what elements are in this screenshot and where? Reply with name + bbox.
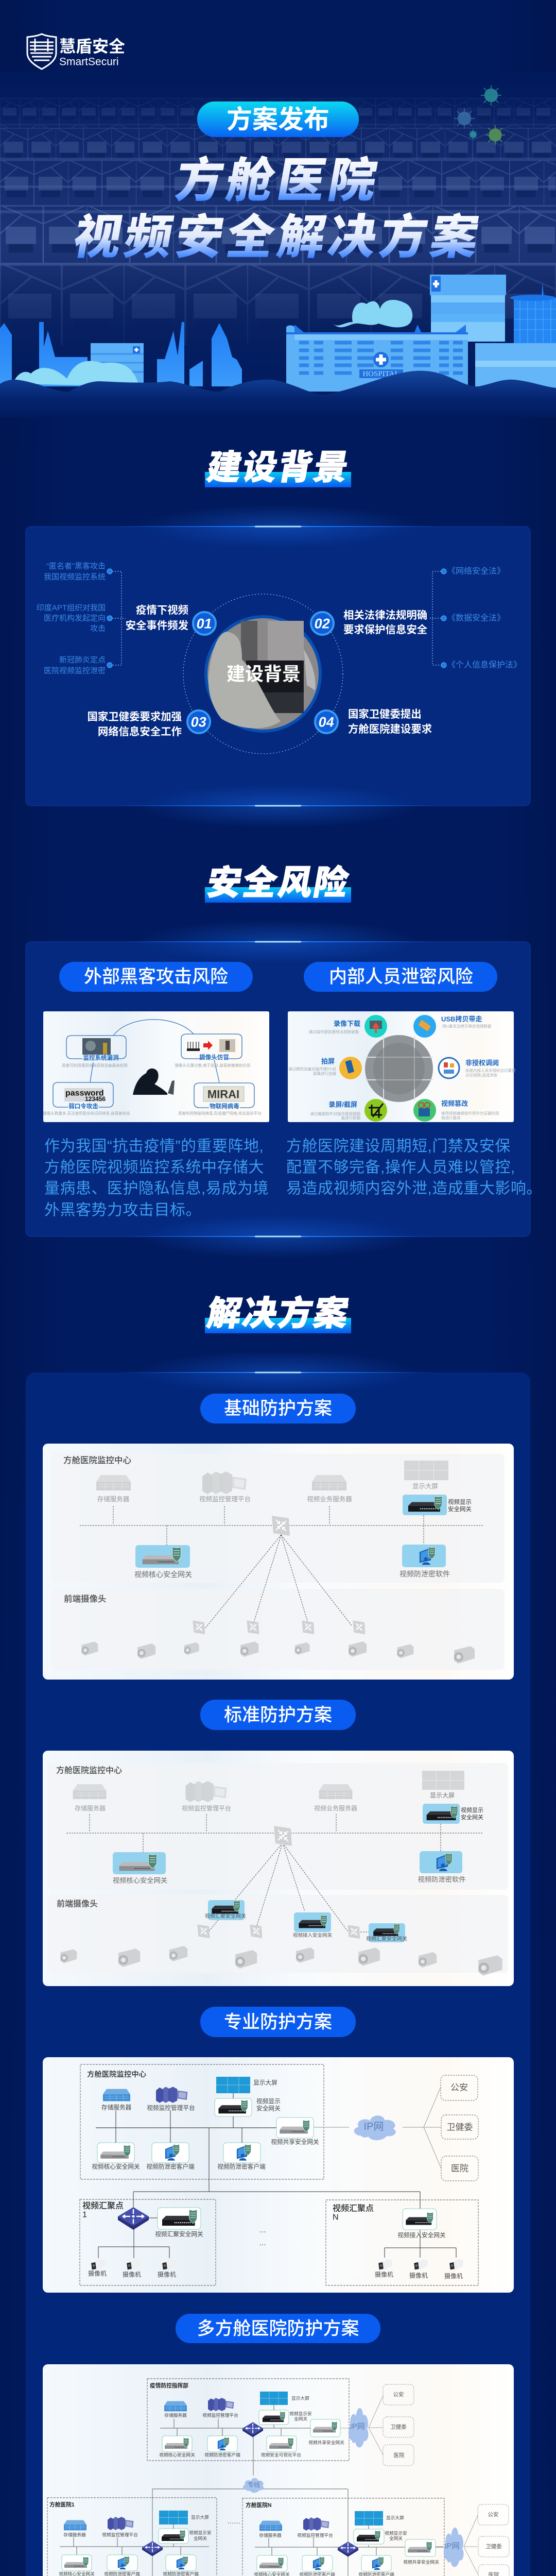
circle: recording download (309, 1015, 387, 1038)
text: external risk description: 量病患、医护隐私信息,易成为境 (44, 1180, 269, 1197)
main title: 视频安全解决方案 (70, 210, 486, 264)
item 01: incidents: 安全事件频发 (126, 619, 188, 632)
access switches (197, 1924, 360, 1939)
device: management platform (182, 1781, 231, 1812)
device: aggregation gateway A (205, 1900, 246, 1920)
hero banner (0, 34, 556, 417)
item 02 details list: 《网络安全法》 (447, 566, 505, 576)
box: monitoring vulnerability (62, 1036, 128, 1067)
circle: unauthorized access: 系统内部人员非授权访问重要 (465, 1067, 516, 1073)
pill: standard protection: 标准防护方案 (224, 1705, 332, 1725)
cloud: command IP network and agencies: 医院 (393, 2452, 405, 2459)
aggregation point 1: 摄像机 (123, 2270, 141, 2278)
circle: USB copy: USB拷贝带走 (441, 1015, 482, 1023)
device: display gateway (403, 1495, 472, 1515)
ellipsis between points: … (259, 2239, 266, 2247)
pill: external risk: 外部黑客攻击风险 (84, 967, 228, 987)
diagram: basic protection (43, 1444, 514, 1680)
hospital 1: 全网关 (194, 2535, 207, 2541)
device: access gateway: 视频接入安全网关 (293, 1932, 332, 1938)
text: external risk description: 方舱医院视频监控系统中存储大 (44, 1159, 264, 1176)
main title (70, 154, 486, 264)
device: aggregation gateway B (366, 1923, 407, 1942)
box: weak password: password (65, 1089, 104, 1097)
device: core switch (272, 1516, 290, 1536)
circle: USB copy: 用U盘非法拷贝带走视频数据 (442, 1023, 492, 1028)
box: monitoring vulnerability: 监控系统漏洞 (83, 1054, 118, 1061)
hospital 1: 显示大屏 (191, 2514, 209, 2520)
circle: unauthorized access: 非授权调阅 (465, 1059, 499, 1066)
item 04: 国家卫健委提出 (348, 708, 422, 720)
hospital N: 存储服务器 (259, 2532, 282, 2538)
item 01: incidents (126, 604, 216, 635)
logo: 慧盾安全 SmartSecuri: SmartSecuri (59, 56, 119, 68)
diagram: basic protection: 方舱医院监控中心 (63, 1455, 132, 1465)
device: display gateway (423, 1804, 483, 1824)
item 02: laws: 相关法律法规明确 (343, 609, 427, 621)
item 02: laws: 02 (313, 616, 332, 631)
item 02: laws: 要求保护信息安全 (343, 623, 428, 636)
device: management platform: 视频监控管理平台 (199, 1495, 251, 1503)
dotted orbit circle (183, 594, 343, 754)
ellipsis between points: … (259, 2226, 266, 2234)
agency labels: 卫健委 (447, 2123, 473, 2132)
circle: unauthorized access: 点位视频,造成泄密 (465, 1073, 498, 1078)
device: management platform (147, 2087, 195, 2111)
pill: internal risk: 内部人员泄密风险 (329, 967, 473, 987)
hospital N: 显示大屏 (386, 2515, 404, 2520)
foreground hills (0, 371, 556, 417)
diagram: standard protection: 前端摄像头 (57, 1899, 98, 1908)
device: storage server: 存储服务器 (75, 1804, 106, 1812)
pill: external risk (59, 962, 253, 992)
aggregation point 1 (82, 2201, 203, 2278)
cloud: command IP network and agencies (349, 2384, 414, 2466)
command center: 视频核心安全网关 (159, 2452, 195, 2458)
circle: screen capture: 录屏/截屏 (328, 1100, 357, 1109)
pill: basic protection (200, 1394, 356, 1423)
ellipsis between hospitals: ...... (228, 2518, 241, 2525)
circle: screen photo (288, 1057, 362, 1079)
device: core gateway: 视频核心安全网关 (92, 2163, 140, 2170)
text: internal risk description: 配置不够完备,操作人员难以管控, (286, 1159, 515, 1176)
box: weak password: 弱口令攻击 (68, 1103, 98, 1110)
cloud: hospital N IP network and agencies (444, 2504, 509, 2576)
circle: video tampering (413, 1099, 499, 1122)
aggregation point 1: 视频汇聚安全网关 (155, 2231, 203, 2238)
panel: solutions (26, 1351, 530, 2576)
box: weak password: 123456 (85, 1095, 106, 1103)
device: aggregation gateway A: 视频汇聚安全网关 (205, 1912, 246, 1920)
circle: unauthorized access (439, 1058, 516, 1078)
hospital 1 (49, 2501, 212, 2576)
cameras (60, 1946, 502, 1976)
external agencies (441, 2075, 478, 2181)
box: weak password: 摄像头数量多,无法使用复杂验证码体系,容易被攻击 (43, 1111, 130, 1116)
device: storage server: 存储服务器 (101, 2104, 132, 2111)
diagram: standard protection (43, 1751, 514, 1986)
circle: video tampering: 视频篡改 (441, 1099, 468, 1108)
cloud: dedicated line (243, 2478, 264, 2493)
device: display wall: 显示大屏 (253, 2079, 277, 2087)
device: anti-leak client (217, 2143, 266, 2170)
device: core switch (274, 1826, 292, 1846)
command center (150, 2382, 344, 2458)
device: management platform: 视频监控管理平台 (147, 2104, 195, 2111)
circle: recording download: 录像下载 (334, 1020, 360, 1027)
device: display gateway: 视频显示 (461, 1806, 483, 1814)
diagram: basic protection: 前端摄像头 (64, 1594, 106, 1604)
aggregation point N: 视频汇聚点 (333, 2204, 374, 2213)
device: core gateway (113, 1852, 167, 1885)
section heading: 建设背景: 建设背景 (204, 449, 353, 487)
circle: screen photo: 通过数码设备对操作摩PC机 (288, 1066, 336, 1072)
pill: professional protection: 专业防护方案 (224, 2012, 332, 2032)
agency labels: 公安 (450, 2082, 468, 2093)
command center: 全网关 (294, 2416, 307, 2421)
circle: recording download: 通过操作摩挂摘导出视频录像 (309, 1029, 359, 1035)
pill: professional protection (200, 2007, 356, 2037)
hospital N: 视频共享安全网关 (403, 2559, 439, 2565)
cameras (81, 1641, 475, 1664)
device: management platform (199, 1471, 251, 1503)
item 01 details list: 攻击 (90, 624, 106, 633)
item 02 details list: 《数据安全法》 (447, 613, 505, 622)
cloud: hospital N IP network and agencies: 卫健委 (485, 2543, 502, 2550)
device: storage server (96, 1475, 131, 1503)
item 03 (87, 710, 210, 738)
aggregation point N: 视频接入安全网关 (397, 2232, 446, 2239)
device: sharing gateway: 视频共享安全网关 (271, 2138, 319, 2145)
aggregation point 1: 视频汇聚点 (82, 2201, 124, 2210)
item 02: laws (311, 609, 428, 636)
diagram: insider leak (288, 1011, 516, 1122)
item 01 details list: 医院视频监控泄密 (44, 666, 106, 675)
aggregation point N: 摄像机 (444, 2272, 463, 2280)
cloud: command IP network and agencies: 公安 (393, 2391, 404, 2398)
hospital N (246, 2502, 439, 2576)
item 02 details list: 《个人信息保护法》 (447, 660, 522, 670)
circle: screen photo: 屏幕进行拍摄 (313, 1071, 336, 1076)
item 01 details list: 印度APT组织对我国 (37, 604, 106, 612)
device: access gateway (293, 1912, 332, 1938)
cloud: IP network (354, 2115, 396, 2140)
device: core gateway: 视频核心安全网关 (113, 1876, 167, 1885)
collage of camera feeds (365, 1035, 433, 1102)
hospital 1: 存储服务器 (63, 2532, 86, 2537)
logo: 慧盾安全 SmartSecuri (27, 34, 125, 69)
logo: 慧盾安全 SmartSecuri: 慧盾安全 (59, 37, 125, 56)
cloud: dedicated line: 专线 (248, 2481, 260, 2488)
cloud: hospital N IP network and agencies: 公安 (488, 2511, 498, 2518)
box: IoT virus: MIRAI (207, 1088, 239, 1100)
device: anti-leak client: 视频防泄密客户端 (217, 2163, 266, 2170)
illustration: city skyline and hospital: HOSPITAL (362, 370, 399, 378)
circle: video tampering: 频进行篡改 (441, 1115, 461, 1120)
device: anti-leak software: 视频防泄密软件 (418, 1875, 466, 1884)
agency labels: 医院 (451, 2164, 468, 2173)
device: display wall (404, 1461, 448, 1490)
device: core gateway (134, 1545, 192, 1579)
access switches (193, 1620, 365, 1634)
device: aggregation gateway B: 视频汇聚安全网关 (366, 1935, 407, 1942)
diagram: professional protection (43, 2057, 514, 2293)
device: display wall: 显示大屏 (430, 1792, 455, 1799)
pill: standard protection (200, 1700, 356, 1730)
pill: internal risk (304, 962, 497, 992)
command center: 视频共享安全网关 (308, 2439, 344, 2445)
command center: 视频防泄密客户端 (204, 2452, 240, 2458)
section heading: 安全风险: 安全风险 (204, 864, 353, 902)
center photo: medic at laptop (204, 615, 322, 733)
command center: 视频监控管理平台 (202, 2412, 238, 2418)
item 03: 03 (189, 714, 208, 730)
command center: 存储服务器 (164, 2412, 187, 2418)
device: business server: 视频业务服务器 (314, 1804, 357, 1812)
diagram: professional protection: 方舱医院监控中心 (87, 2070, 146, 2079)
device: storage server (101, 2089, 132, 2111)
diagram: standard protection: 方舱医院监控中心 (56, 1765, 122, 1775)
command center: 显示大屏 (291, 2395, 309, 2401)
hospital N: 视频显示安 (385, 2530, 407, 2536)
device: anti-leak software (399, 1545, 450, 1578)
cloud: hospital N IP network and agencies: IP网 (444, 2542, 460, 2550)
device: business server: 视频业务服务器 (307, 1495, 352, 1503)
box: camera spoofing: 摄像头仿冒 (199, 1054, 229, 1061)
device: display gateway: 视频显示 (256, 2098, 281, 2105)
text: internal risk description (286, 1138, 542, 1197)
device: display gateway (215, 2098, 281, 2116)
device: management platform: 视频监控管理平台 (182, 1804, 231, 1812)
item 04: 04 (317, 714, 336, 730)
text: internal risk description: 易造成视频内容外泄,造成重大影响。 (286, 1180, 542, 1197)
device: core gateway: 视频核心安全网关 (134, 1570, 192, 1579)
text: external risk description: 外黑客势力攻击目标。 (44, 1201, 201, 1219)
panel: background (26, 505, 530, 827)
hero background photo: field hospital scaffold (0, 72, 556, 412)
item 01 details list: 新冠肺炎定点 (59, 655, 106, 665)
text: internal risk description: 方舱医院建设周期短,门禁及安保 (286, 1138, 511, 1155)
item 01: incidents: 疫情下视频 (136, 604, 188, 616)
main title: 方舱医院 (171, 154, 385, 207)
circle: screen capture (310, 1099, 387, 1122)
text: external risk description: 作为我国“抗击疫情”的重要阵地, (44, 1138, 264, 1155)
box: weak password (43, 1082, 130, 1116)
item 03: 国家卫健委要求加强 (87, 710, 182, 723)
device: core gateway (92, 2143, 140, 2170)
command center: 视频安全可视化平台 (261, 2452, 301, 2458)
virus icons (454, 85, 505, 145)
device: anti-leak software: 视频防泄密软件 (399, 1570, 450, 1578)
item 04 (315, 708, 432, 735)
section heading: 解决方案: 解决方案 (204, 1295, 353, 1333)
aggregation point 1: 1 (82, 2210, 87, 2219)
aggregation point N: 摄像机 (409, 2272, 428, 2279)
text: external risk description (44, 1138, 269, 1219)
circle: USB copy (413, 1015, 492, 1038)
device: business server (314, 1784, 357, 1812)
panel: security risks (26, 920, 542, 1258)
item 01 details list (37, 562, 126, 675)
item 03: 网络信息安全工作 (98, 725, 182, 738)
release badge (197, 101, 359, 137)
item 01 details list: 我国视频监控系统 (44, 573, 106, 581)
aggregation point 1: 摄像机 (158, 2270, 176, 2278)
illustration: city skyline and hospital (0, 275, 556, 392)
icon: hacker at laptop (133, 1069, 175, 1095)
agency labels (447, 2082, 473, 2173)
hospital N: 方舱医院N (246, 2502, 271, 2509)
item 04: 方舱医院建设要求 (348, 723, 432, 735)
release badge: 方案发布 (227, 105, 329, 134)
cloud: command IP network and agencies: 卫健委 (390, 2424, 407, 2430)
item 01 details list: “匿名者”黑客攻击 (46, 562, 106, 571)
pill: multi-hospital protection: 多方舱医院防护方案 (197, 2318, 359, 2339)
device: display wall (216, 2077, 277, 2093)
diagram: multi-hospital protection (43, 2364, 514, 2576)
hospital N: 视频监控管理平台 (297, 2532, 333, 2538)
command center: 疫情防控指挥部 (150, 2382, 188, 2389)
aggregation point N (333, 2204, 463, 2280)
box: IoT virus (178, 1083, 262, 1116)
item 01 details list: 医疗机构发起定向 (44, 614, 106, 622)
hospital 1: 方舱医院1 (49, 2501, 75, 2508)
aggregation point 1: 摄像机 (88, 2269, 107, 2277)
device: display gateway: 安全网关 (256, 2105, 281, 2112)
diagram: external attack (43, 1011, 269, 1122)
cloud: command IP network and agencies: IP网 (350, 2422, 365, 2431)
hospital N: 全网关 (389, 2535, 403, 2541)
device: business server (307, 1475, 352, 1503)
device: anti-leak client: 视频防泄密客户端 (146, 2163, 195, 2170)
item 01: incidents: 01 (195, 616, 214, 631)
ellipsis between points (259, 2226, 266, 2247)
device: display gateway: 安全网关 (461, 1814, 483, 1821)
box: monitoring vulnerability: 黑客可利用漏洞自由获取设备最高权限 (62, 1062, 128, 1067)
pill: basic protection: 基础防护方案 (224, 1398, 332, 1419)
hospital 1: 视频显示安 (189, 2530, 212, 2535)
circle: screen photo: 拍屏 (321, 1057, 335, 1065)
item 02 details list (428, 566, 522, 670)
aggregation point N: 摄像机 (375, 2270, 393, 2278)
cloud: IP network: IP网 (364, 2121, 384, 2132)
circle: screen capture: 面进行抓图 (341, 1115, 360, 1120)
circle: video tampering: 使用视频编辑软件将作为证据的视 (441, 1111, 499, 1116)
center photo: medic at laptop: 建设背景 (227, 664, 301, 684)
device: anti-leak client (146, 2143, 195, 2170)
device: sharing gateway (271, 2117, 319, 2145)
device: display gateway: 视频显示 (448, 1498, 472, 1505)
box: IoT virus: 黑客利用物联网病毒,形成僵尸网络,攻击监控平台 (178, 1111, 262, 1116)
device: display gateway: 安全网关 (448, 1505, 472, 1513)
pill: multi-hospital protection (176, 2314, 380, 2343)
box: camera spoofing (175, 1034, 250, 1067)
hospital 1: 视频监控管理平台 (102, 2532, 138, 2537)
aggregation point N: N (333, 2213, 339, 2222)
device: storage server (73, 1784, 106, 1812)
device: anti-leak software (418, 1851, 466, 1884)
box: camera spoofing: 摄像头位置分散,难于监控,容易被替换和仿冒 (175, 1062, 250, 1067)
box: IoT virus: 物联网病毒 (210, 1103, 239, 1110)
command center: 视频显示安 (289, 2411, 312, 2416)
device: display wall: 显示大屏 (412, 1483, 438, 1490)
circle: screen capture: 通过截图软件对操作摩视频图 (310, 1111, 360, 1116)
device: storage server: 存储服务器 (97, 1495, 130, 1503)
device: display wall (422, 1771, 464, 1799)
